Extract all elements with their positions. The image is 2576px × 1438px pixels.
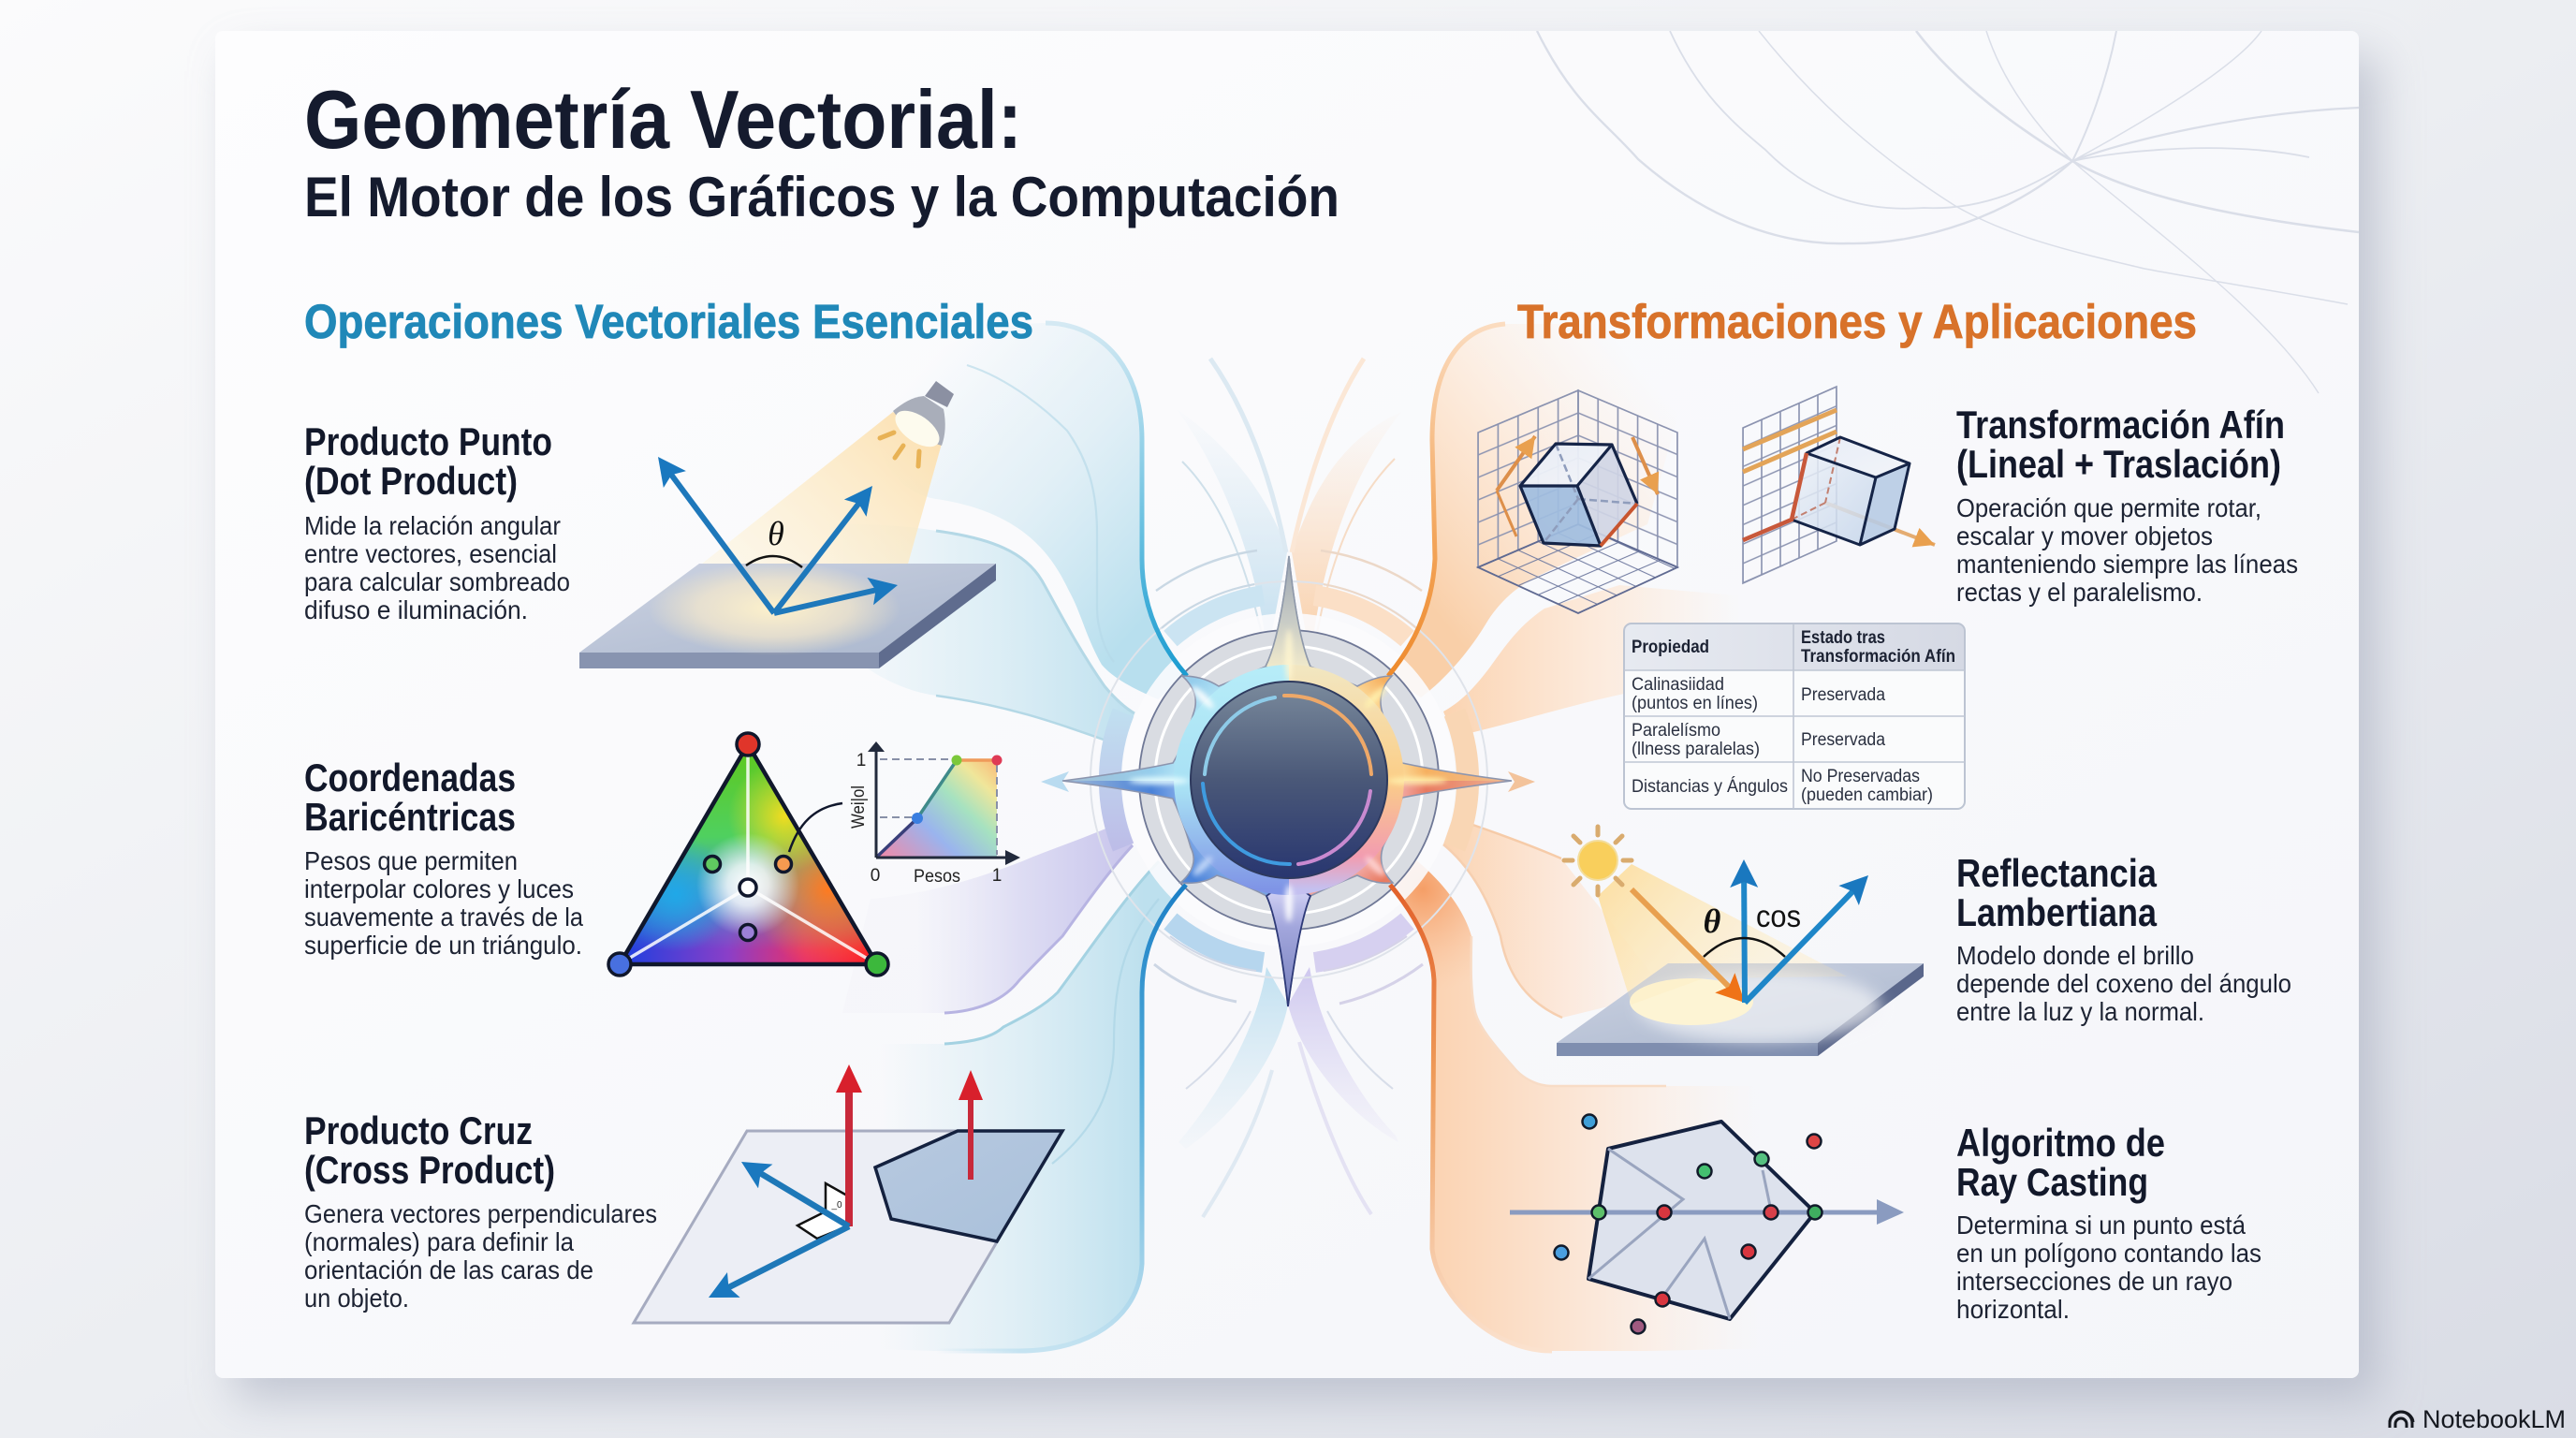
north arm (1266, 556, 1310, 680)
text block: Transformación Afín: escalar y mover objetos (1956, 521, 2213, 550)
hub base: rings and bands (1090, 550, 1487, 1004)
table: affine properties: Distancias y Ángulos (1632, 777, 1788, 797)
table: affine properties (1624, 624, 1965, 809)
text block: Producto Cruz: (Cross Product) (304, 1148, 555, 1192)
diagram: affine grid with cube before (1478, 390, 1677, 613)
text block: Producto Punto: difuso e iluminación. (304, 595, 528, 624)
text block: Coordenadas Baricéntricas: interpolar colores y luces (304, 874, 574, 903)
diagram: lambertian reflectance: cos (1756, 899, 1801, 933)
central hub emblem (1041, 556, 1535, 1006)
diagram: ray casting polygon (1510, 1114, 1904, 1333)
text block: Producto Cruz (304, 1108, 657, 1313)
text block: Reflectancia Lambertiana: Reflectancia (1956, 851, 2158, 895)
table: affine properties: (llness paralelas) (1632, 740, 1760, 759)
text block: Producto Cruz: Genera vectores perpendiculares (304, 1199, 657, 1228)
diagram: lambertian reflectance (1557, 827, 1924, 1056)
connector line: blue upper (1046, 323, 1187, 676)
diagram: dot product with lamp (579, 381, 996, 668)
table: affine properties: Propiedad (1632, 638, 1709, 657)
text block: Reflectancia Lambertiana: entre la luz y la normal. (1956, 997, 2204, 1026)
text block: Transformación Afín: manteniendo siempre las líneas (1956, 550, 2298, 579)
text block: Coordenadas Baricéntricas (304, 756, 583, 960)
title block: El Motor de los Gráficos y la Computación (304, 166, 1339, 228)
title block: Geometría Vectorial: (304, 73, 1022, 166)
text block: Algoritmo de Ray Casting: horizontal. (1956, 1295, 2070, 1324)
text block: Producto Punto: para calcular sombreado (304, 567, 570, 596)
text block: Transformación Afín: (Lineal + Traslación) (1956, 442, 2281, 486)
text block: Producto Punto (304, 419, 570, 624)
text block: Algoritmo de Ray Casting: Algoritmo de (1956, 1121, 2165, 1165)
spark highlights (1129, 629, 1447, 922)
text block: Producto Cruz: un objeto. (304, 1284, 409, 1313)
diagram: dot product with lamp: θ (768, 515, 784, 552)
table: affine properties: Preservada (1801, 730, 1885, 750)
orange motion arrows (1497, 436, 1658, 536)
text block: Producto Cruz: (normales) para definir la (304, 1227, 574, 1256)
text block: Algoritmo de Ray Casting: Determina si un punto está (1956, 1211, 2246, 1240)
connector line: blue tail (936, 1348, 1019, 1354)
dark core disc (1191, 682, 1387, 878)
luminous halo (1182, 673, 1396, 887)
text block: Reflectancia Lambertiana: Modelo donde el brillo (1956, 941, 2194, 970)
text block: Reflectancia Lambertiana (1956, 851, 2291, 1026)
table: affine properties: Estado tras (1801, 628, 1885, 648)
text block: Algoritmo de Ray Casting: Ray Casting (1956, 1160, 2148, 1204)
blue vectors (709, 1162, 849, 1298)
table: affine properties: Calinasiidad (1632, 675, 1724, 695)
diagram: lambertian reflectance: θ (1704, 902, 1721, 940)
sun (1564, 827, 1632, 895)
diagram: cross product plane: _0 (830, 1200, 842, 1211)
title block (304, 73, 1339, 228)
text block: Producto Punto: Producto Punto (304, 419, 552, 463)
right arrow tip (1508, 771, 1535, 792)
text block: Producto Punto: Mide la relación angular (304, 511, 561, 540)
connector line: orange upper (1388, 324, 1505, 676)
diagram: cross product plane (634, 1064, 1062, 1323)
text block: Coordenadas Baricéntricas: superficie de un triángulo. (304, 931, 582, 960)
heading: left section: Operaciones Vectoriales Esenciales (304, 295, 1033, 348)
flow ribbons: blue and purple left, orange right (872, 323, 1704, 1351)
table: affine properties: (puntos en línes) (1632, 694, 1758, 713)
south arm (1266, 880, 1310, 1006)
chart: weights mini graph: Pesos (914, 867, 960, 887)
text block: Reflectancia Lambertiana: Lambertiana (1956, 890, 2158, 934)
text block: Producto Punto: (Dot Product) (304, 459, 518, 503)
plate (579, 564, 996, 668)
text block: Transformación Afín: Operación que permite rotar, (1956, 493, 2261, 522)
text block: Coordenadas Baricéntricas: suavemente a través de la (304, 902, 583, 932)
text block: Coordenadas Baricéntricas: Baricéntricas (304, 795, 516, 839)
card shadow (234, 56, 2378, 1400)
text block: Producto Punto: entre vectores, esencial (304, 539, 557, 568)
red normals (836, 1064, 983, 1226)
table: affine properties: Preservada (1801, 685, 1885, 705)
table: affine properties: Paralelísmo (1632, 721, 1720, 741)
NotebookLM badge: NotebookLM (2422, 1405, 2566, 1433)
text block: Producto Cruz: Producto Cruz (304, 1108, 533, 1152)
table: affine properties: Transformación Afín (1801, 647, 1955, 667)
connector line: blue lower (1019, 885, 1186, 1351)
text block: Coordenadas Baricéntricas: Pesos que permiten (304, 846, 518, 875)
inner arcs (1203, 696, 1371, 864)
diagram: barycentric triangle (608, 733, 888, 976)
heading: right section: Transformaciones y Aplicaciones (1517, 295, 2197, 348)
petals around hub (1177, 359, 1401, 1217)
diagram: affine grid with cube after (1743, 387, 1935, 583)
vectors (658, 457, 898, 613)
eight point star frame (1062, 556, 1512, 1006)
text block: Algoritmo de Ray Casting: en un polígono contando las (1956, 1239, 2261, 1268)
chart: weights mini graph: 0 (871, 866, 880, 886)
chart: weights mini graph: Wei|ol (849, 785, 869, 829)
text block: Transformación Afín: rectas y el paralelismo. (1956, 578, 2203, 607)
text block: Algoritmo de Ray Casting (1956, 1121, 2261, 1324)
text block: Transformación Afín (1956, 403, 2298, 607)
text block: Reflectancia Lambertiana: depende del coxeno del ángulo (1956, 969, 2291, 998)
left arrow tip (1041, 771, 1069, 792)
chart: weights mini graph: 1 (856, 751, 866, 770)
chart: weights mini graph: 1 (992, 866, 1002, 886)
text block: Transformación Afín: Transformación Afín (1956, 403, 2285, 447)
text block: Producto Cruz: orientación de las caras de (304, 1255, 593, 1284)
table: affine properties: No Preservadas (1801, 767, 1920, 786)
lamp (880, 381, 954, 466)
connector line: orange lower (1390, 885, 1552, 1351)
main card (215, 31, 2359, 1378)
text block: Algoritmo de Ray Casting: intersecciones de un rayo (1956, 1267, 2232, 1296)
text block: Coordenadas Baricéntricas: Coordenadas (304, 756, 516, 800)
chart: weights mini graph (849, 741, 1020, 887)
table: affine properties: (pueden cambiar) (1801, 785, 1933, 805)
